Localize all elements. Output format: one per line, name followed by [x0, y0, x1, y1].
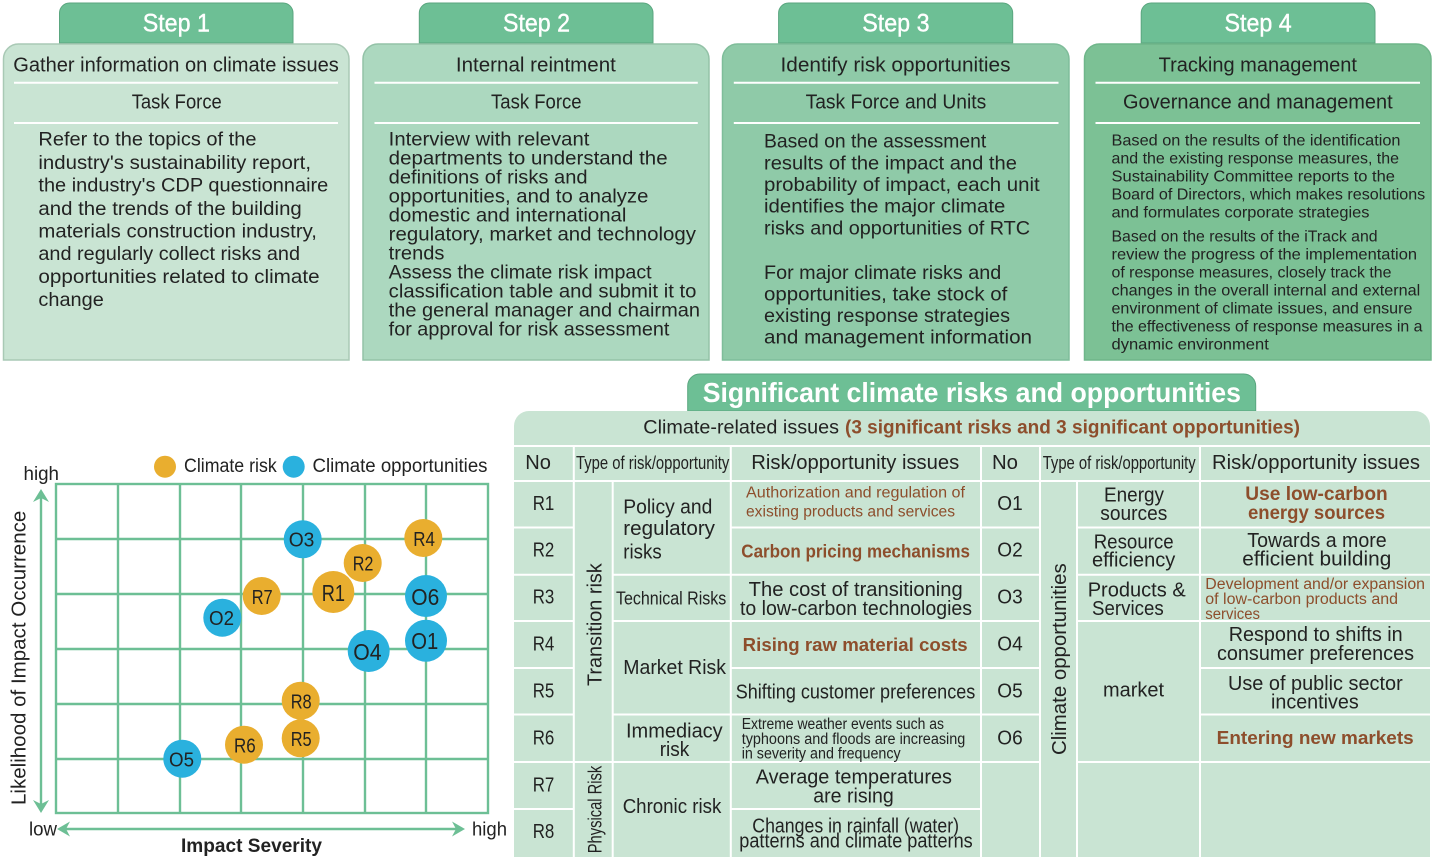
- opportunity issues: efficient building: [1242, 549, 1391, 571]
- data points: [163, 519, 447, 778]
- step 1 body text: the industry's CDP questionnaire: [38, 175, 328, 197]
- step 4 body text: Based on the results of the identification: [1112, 133, 1400, 150]
- step 4 body text: of response measures, closely track the: [1112, 265, 1392, 282]
- risk types: Immediacy: [626, 721, 723, 743]
- opportunity issues: energy sources: [1248, 502, 1385, 524]
- table background: [514, 411, 1430, 857]
- step 1 body text: industry's sustainability report,: [38, 152, 311, 174]
- risk issues: to low-carbon technologies: [740, 598, 972, 620]
- panel: step 4: [1084, 3, 1431, 360]
- opportunity issues: Development and/or expansion: [1205, 576, 1425, 593]
- step 3 tab: [779, 3, 1013, 43]
- step 1 card: [4, 44, 349, 360]
- step 3 body text: For major climate risks and: [764, 262, 1001, 284]
- step 3 heading: Identify risk opportunities: [780, 55, 1010, 77]
- step 4 tab: [1141, 3, 1375, 43]
- opportunity types: sources: [1100, 503, 1167, 525]
- opportunity issues: incentives: [1271, 692, 1359, 714]
- opportunity numbers: O4: [997, 634, 1023, 656]
- step 3 body text: identifies the major climate: [764, 196, 1005, 218]
- panel: step 1: [4, 3, 349, 360]
- opportunity numbers: O1: [997, 493, 1023, 515]
- table header row: Risk/opportunity issues: [751, 452, 959, 474]
- step 1 body text: materials construction industry,: [38, 220, 317, 242]
- step 3 body text: existing response strategies: [764, 305, 1010, 327]
- risk numbers: [533, 493, 554, 843]
- opportunity types: Services: [1092, 598, 1164, 620]
- axis label: x high: high: [472, 820, 507, 840]
- risk numbers: R8: [533, 821, 554, 843]
- step 2 body text: opportunities, and to analyze: [389, 186, 648, 208]
- risk types: Technical Risks: [616, 587, 726, 608]
- step 4 body text: [1112, 133, 1425, 354]
- step 4 body text: and formulates corporate strategies: [1112, 205, 1369, 222]
- risk issues: patterns and climate patterns: [739, 830, 973, 852]
- risk numbers: R7: [533, 775, 554, 797]
- step 2 body text: trends: [389, 243, 445, 265]
- step 4 owner: Governance and management: [1123, 92, 1393, 114]
- data points: O6: [411, 584, 439, 610]
- step 2 body text: for approval for risk assessment: [389, 319, 670, 341]
- risk numbers: R2: [533, 540, 554, 562]
- risk issues: Shifting customer preferences: [736, 681, 975, 703]
- risk issues: Extreme weather events such as: [742, 716, 944, 733]
- y axis title: Likelihood of Impact Occurrence: [9, 511, 31, 805]
- risk issues: are rising: [813, 785, 894, 807]
- opportunity numbers: O3: [997, 587, 1023, 609]
- risk types: Market Risk: [623, 657, 727, 679]
- risk numbers: R1: [533, 493, 554, 515]
- step 3 body text: risks and opportunities of RTC: [764, 218, 1030, 240]
- step 4 body text: dynamic environment: [1112, 337, 1269, 354]
- x axis arrow: [57, 822, 465, 836]
- step 1 tab: [60, 3, 293, 43]
- risk numbers: R6: [533, 728, 554, 750]
- data points: R7: [252, 587, 273, 609]
- risk issues: Average temperatures: [756, 766, 952, 788]
- panel: step 2: [363, 3, 709, 360]
- risk numbers: R4: [533, 634, 554, 656]
- risk issues: Rising raw material costs: [743, 634, 968, 655]
- opportunity numbers: O2: [997, 540, 1023, 562]
- step 1 body text: [38, 129, 328, 311]
- opportunity issues: Entering new markets: [1217, 727, 1414, 748]
- opportunity numbers: O5: [997, 680, 1023, 702]
- step 2 body text: classification table and submit it to: [389, 281, 697, 303]
- opportunity types: [1088, 485, 1186, 702]
- opportunity types: Resource: [1094, 531, 1174, 553]
- risk types: regulatory: [623, 518, 715, 540]
- vertical label: climate opportunities: Climate opportunities: [1049, 563, 1071, 755]
- step 3 body text: Based on the assessment: [764, 131, 987, 153]
- risk issues: existing products and services: [746, 503, 955, 520]
- step 3 card: [722, 44, 1069, 360]
- step 3 tab: Step 3: [862, 10, 930, 38]
- opportunity issues: services: [1205, 606, 1260, 623]
- step 1 body text: and the trends of the building: [38, 198, 302, 220]
- table caption: Climate-related issues: [643, 416, 839, 438]
- step 1 owner: Task Force: [132, 92, 222, 114]
- data points: R4: [413, 529, 435, 551]
- data points: R6: [234, 735, 256, 757]
- step 1 heading: Gather information on climate issues: [13, 55, 339, 77]
- risk issues: in severity and frequency: [742, 745, 901, 762]
- step 3 body text: and management information: [764, 327, 1032, 349]
- legend: [154, 456, 488, 478]
- opportunity issues: consumer preferences: [1217, 643, 1414, 665]
- table header row: [525, 452, 1420, 474]
- panel: significant climate risks and opportunities: [514, 374, 1430, 857]
- step 4 body text: environment of climate issues, and ensure: [1112, 301, 1412, 318]
- data points: R2: [353, 554, 373, 576]
- opportunity issues: [1205, 483, 1425, 748]
- step 2 body text: domestic and international: [389, 205, 626, 227]
- legend: Climate opportunities: [312, 456, 488, 477]
- step 2 tab: [419, 3, 653, 43]
- step 1 body text: Refer to the topics of the: [38, 129, 257, 151]
- step 3 body text: [764, 131, 1040, 349]
- step 4 body text: review the progress of the implementation: [1112, 247, 1417, 264]
- table header row: Risk/opportunity issues: [1212, 452, 1420, 474]
- legend: Climate risk: [184, 456, 277, 477]
- data points: R1: [322, 580, 345, 606]
- data points: O1: [411, 628, 438, 654]
- opportunity issues: Towards a more: [1247, 530, 1387, 552]
- opportunity issues: Use low-carbon: [1245, 483, 1388, 505]
- opportunity issues: Use of public sector: [1228, 673, 1403, 695]
- vertical label: physical risk: Physical Risk: [586, 765, 607, 853]
- table caption: [643, 416, 1300, 438]
- step 2 body text: regulatory, market and technology: [389, 224, 696, 246]
- chart: risk matrix: [9, 456, 507, 857]
- step 4 body text: Sustainability Committee reports to the: [1112, 169, 1395, 186]
- opportunity numbers: [997, 493, 1023, 750]
- risk types: Chronic risk: [623, 796, 722, 818]
- panel: step 3: [722, 3, 1069, 360]
- opportunity types: market: [1103, 680, 1164, 702]
- step 3 body text: results of the impact and the: [764, 153, 1017, 175]
- step 4 tab: Step 4: [1224, 10, 1292, 38]
- risk issues: [736, 484, 975, 852]
- risk issues: typhoons and floods are increasing: [742, 731, 965, 748]
- risk types: Policy and: [623, 496, 712, 518]
- opportunity types: Energy: [1104, 485, 1164, 507]
- table header row: Type of risk/opportunity: [1043, 453, 1196, 473]
- section title tab: Significant climate risks and opportunities: [703, 377, 1241, 408]
- step 2 body text: definitions of risks and: [389, 167, 588, 189]
- step 2 body text: Assess the climate risk impact: [389, 262, 652, 284]
- table header row: No: [525, 452, 551, 474]
- step 1 body text: change: [38, 289, 104, 311]
- grid: [56, 484, 488, 813]
- step 2 body text: the general manager and chairman: [389, 300, 700, 322]
- risk issues: The cost of transitioning: [749, 579, 963, 601]
- step 2 owner: Task Force: [491, 92, 582, 114]
- table caption: (3 significant risks and 3 significant opportunities): [845, 416, 1300, 438]
- y axis arrow: [33, 489, 49, 813]
- data points: O5: [169, 750, 194, 772]
- step 1 tab: Step 1: [143, 10, 210, 38]
- opportunity types: efficiency: [1092, 550, 1175, 572]
- vertical label: transition risk: Transition risk: [585, 562, 607, 686]
- risk types: [616, 496, 727, 818]
- risk numbers: R5: [533, 680, 554, 702]
- step 4 body text: Board of Directors, which makes resolutions: [1112, 187, 1425, 204]
- data points: O3: [289, 530, 314, 552]
- risk types: risks: [623, 541, 662, 563]
- step 2 body text: departments to understand the: [389, 148, 668, 170]
- risk numbers: R3: [533, 587, 554, 609]
- x axis title: Impact Severity: [181, 836, 322, 857]
- step 4 body text: and the existing response measures, the: [1112, 151, 1399, 168]
- opportunity issues: Respond to shifts in: [1229, 624, 1403, 646]
- data points: O4: [353, 639, 382, 665]
- step 1 body text: opportunities related to climate: [38, 266, 320, 288]
- step 4 body text: Based on the results of the iTrack and: [1112, 229, 1378, 246]
- step 3 body text: probability of impact, each unit: [764, 174, 1040, 196]
- step 3 body text: opportunities, take stock of: [764, 284, 1008, 306]
- axis label: x low: low: [29, 820, 57, 840]
- risk issues: Carbon pricing mechanisms: [741, 540, 970, 561]
- step 3 owner: Task Force and Units: [806, 92, 986, 114]
- step 2 body text: Interview with relevant: [389, 129, 590, 151]
- table header row: Type of risk/opportunity: [576, 453, 729, 473]
- opportunity types: Products &: [1088, 579, 1186, 601]
- axis label: y high: high: [24, 464, 59, 485]
- opportunity issues: of low-carbon products and: [1205, 591, 1398, 608]
- step 2 card: [363, 44, 709, 360]
- opportunity numbers: O6: [997, 728, 1023, 750]
- table header row: No: [992, 452, 1018, 474]
- risk issues: Authorization and regulation of: [746, 484, 966, 501]
- step 4 body text: changes in the overall internal and external: [1112, 283, 1420, 300]
- data points: O2: [209, 608, 234, 630]
- step 1 body text: and regularly collect risks and: [38, 243, 300, 265]
- risk types: risk: [660, 739, 690, 761]
- step 4 heading: Tracking management: [1159, 55, 1357, 77]
- risk issues: Changes in rainfall (water): [752, 816, 959, 838]
- step 2 body text: [389, 129, 700, 341]
- step 2 tab: Step 2: [503, 10, 570, 38]
- step 4 card: [1084, 44, 1431, 360]
- step 4 body text: the effectiveness of response measures in a: [1112, 319, 1423, 336]
- step 2 heading: Internal reintment: [456, 55, 616, 77]
- data points: R5: [291, 729, 312, 751]
- data points: R8: [291, 691, 312, 713]
